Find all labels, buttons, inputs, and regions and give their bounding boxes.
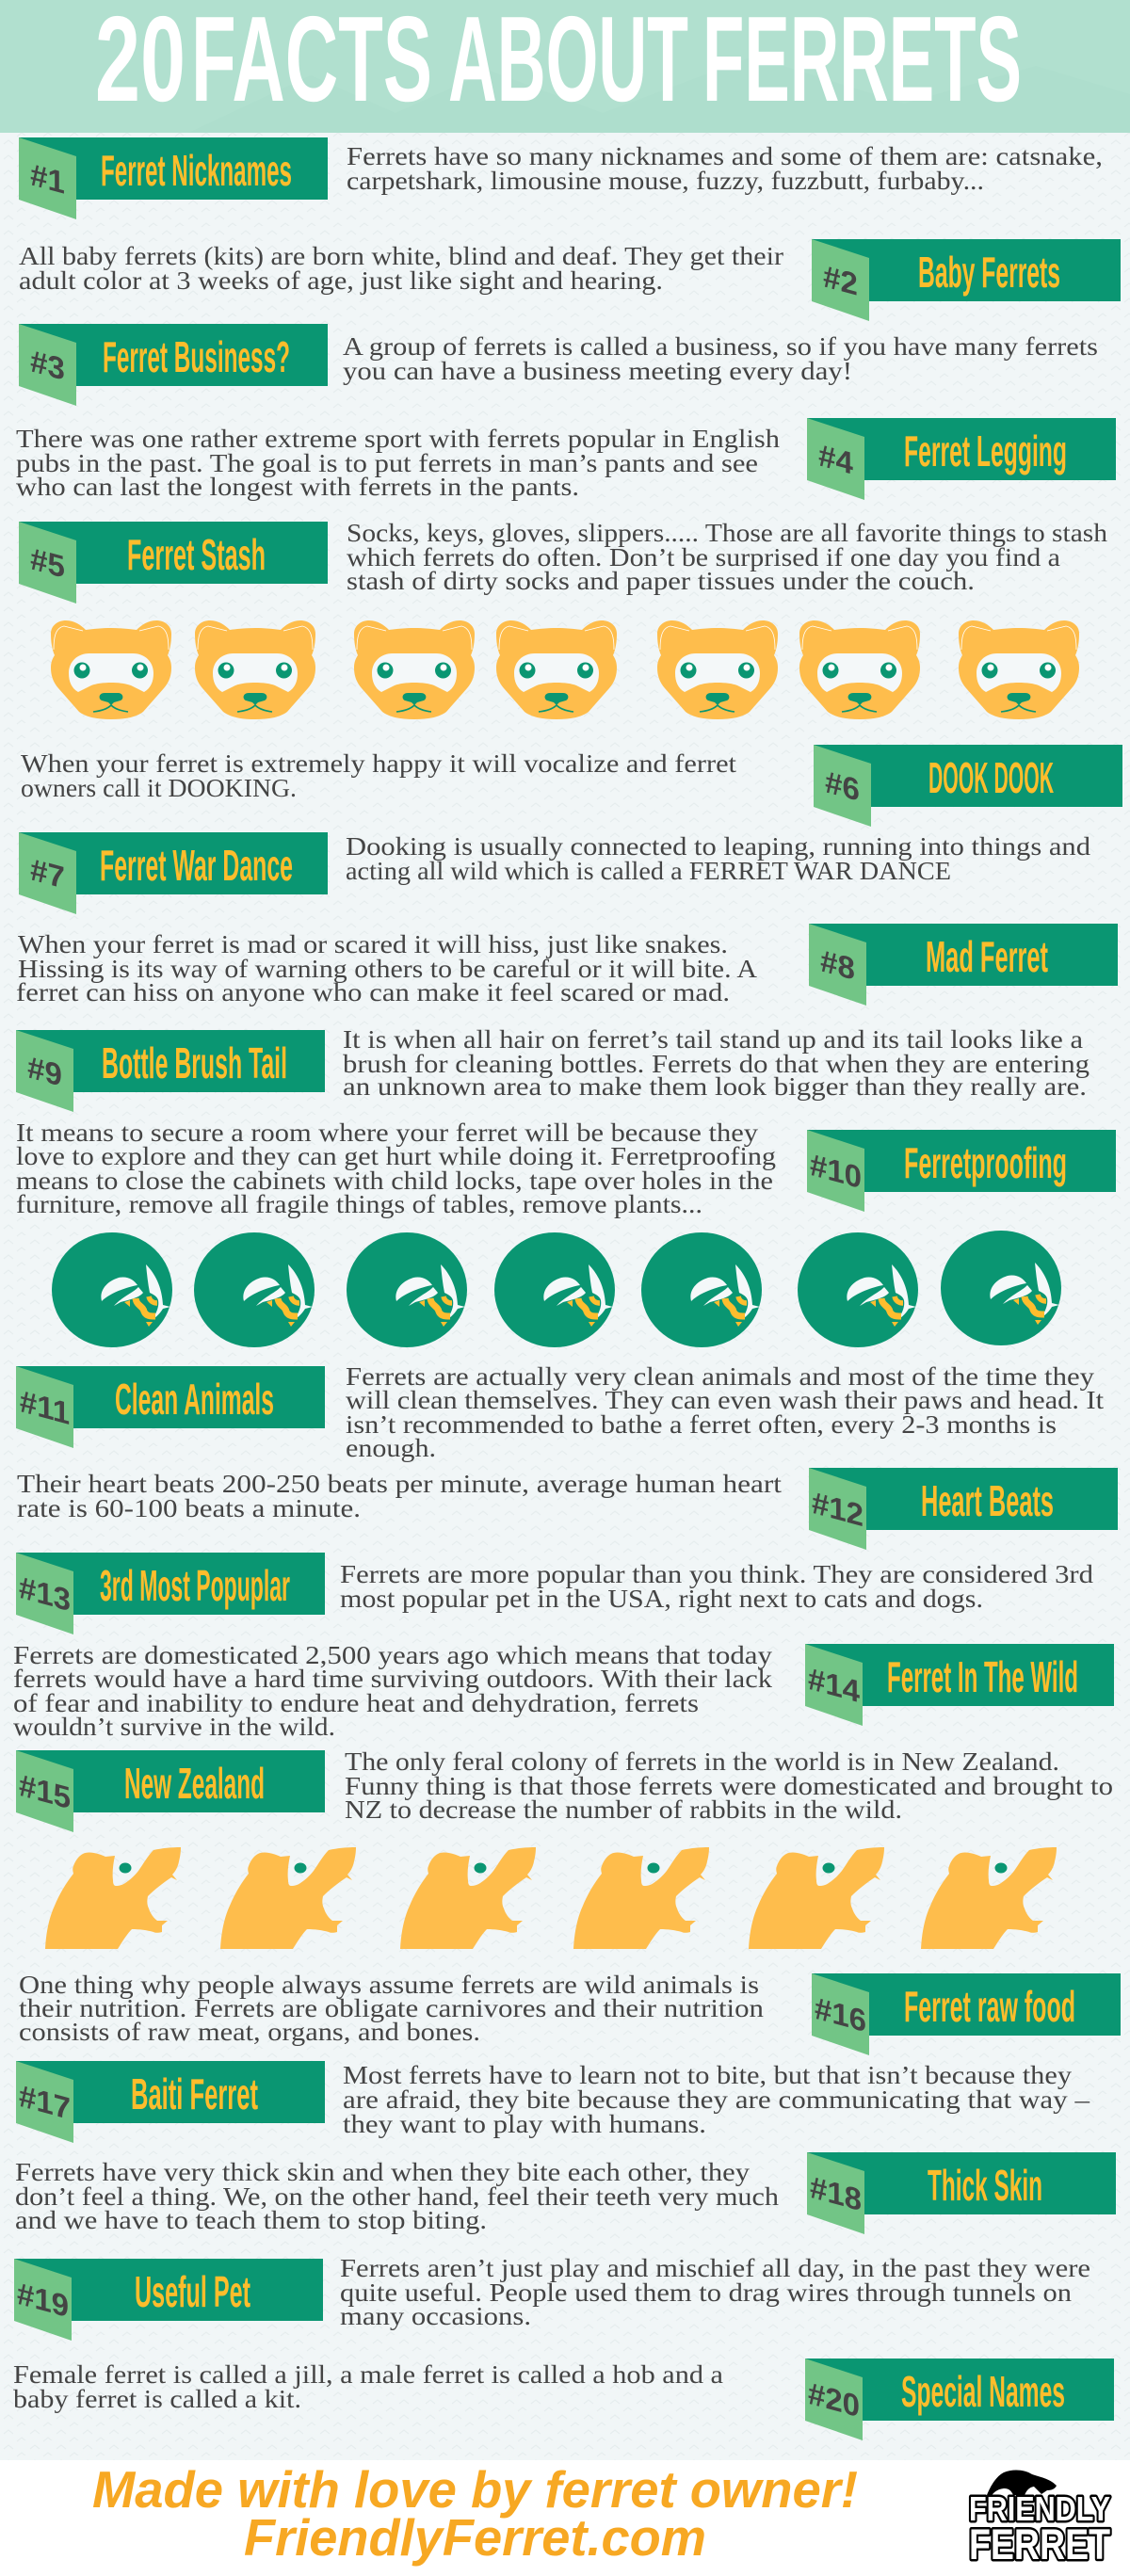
banner: fact 15 bbox=[16, 1750, 325, 1832]
banner: fact 19: Useful Pet bbox=[135, 2267, 250, 2316]
banner: fact 10 bbox=[807, 1130, 1116, 1212]
banner: fact 7: #7 bbox=[30, 853, 65, 896]
banner: fact 20 bbox=[805, 2359, 1114, 2440]
banner: fact 14 bbox=[805, 1644, 1114, 1726]
icon row: ferret profiles bbox=[45, 1847, 1057, 1949]
text: fact 17 bbox=[343, 2060, 1090, 2138]
banner: fact 5 bbox=[19, 522, 328, 604]
text: fact 17: Most ferrets have to learn not to bite, but that isn’t because they bbox=[343, 2060, 1072, 2089]
text: fact 6: owners call it DOOKING. bbox=[21, 773, 297, 802]
banner: fact 9 bbox=[16, 1030, 325, 1112]
panel: fact 8 bbox=[16, 924, 1118, 1006]
panel: fact 11 bbox=[16, 1361, 1104, 1462]
footer text: Made with love by ferret owner! bbox=[92, 2460, 858, 2519]
banner: fact 8: #8 bbox=[820, 944, 855, 988]
text: fact 11: Ferrets are actually very clean animals and most of the time they bbox=[346, 1361, 1094, 1391]
text: fact 16 bbox=[19, 1970, 764, 2046]
header band bbox=[0, 0, 1130, 133]
banner: fact 7: Ferret War Dance bbox=[100, 841, 293, 890]
text: fact 10: means to close the cabinets with child locks, tape over holes in the bbox=[16, 1166, 773, 1195]
text: fact 4: There was one rather extreme sport with ferrets popular in English bbox=[16, 424, 780, 453]
banner: fact 2: #2 bbox=[823, 260, 858, 303]
panel: fact 6 bbox=[21, 745, 1122, 827]
text: fact 15: Funny thing is that those ferrets were domesticated and brought to bbox=[345, 1771, 1113, 1800]
text: fact 20: Female ferret is called a jill, a male ferret is called a hob and a bbox=[13, 2359, 723, 2389]
banner: fact 13 bbox=[16, 1553, 325, 1634]
panel: fact 5 bbox=[19, 518, 1107, 604]
text: fact 19: quite useful. People used them to drag wires through tunnels on bbox=[340, 2278, 1072, 2307]
panel: fact 20 bbox=[13, 2359, 1114, 2440]
title bbox=[95, 0, 1022, 127]
text: fact 5: which ferrets do often. Don’t be surprised if one day you find a bbox=[347, 542, 1060, 572]
banner: fact 16 bbox=[812, 1973, 1121, 2055]
text: fact 6: When your ferret is extremely happy it will vocalize and ferret bbox=[21, 749, 736, 778]
text: fact 16: consists of raw meat, organs, and bones. bbox=[19, 2017, 480, 2046]
banner: fact 1: #1 bbox=[30, 158, 65, 201]
banner: fact 15: New Zealand bbox=[124, 1759, 265, 1808]
text: fact 4 bbox=[16, 424, 780, 501]
panel: fact 4 bbox=[16, 418, 1116, 501]
text: fact 12 bbox=[17, 1469, 782, 1522]
banner: fact 12 bbox=[809, 1468, 1118, 1550]
banner: fact 13: #13 bbox=[19, 1570, 71, 1618]
text: fact 20: baby ferret is called a kit. bbox=[13, 2384, 301, 2413]
panel: fact 2 bbox=[19, 239, 1121, 321]
text: fact 18: don’t feel a thing. We, on the other hand, feel their teeth very much bbox=[15, 2182, 779, 2211]
banner: fact 8 bbox=[809, 924, 1118, 1006]
banner: fact 11: Clean Animals bbox=[115, 1375, 274, 1424]
banner: fact 5: Ferret Stash bbox=[127, 530, 266, 579]
text: fact 1: Ferrets have so many nicknames and some of them are: catsnake, bbox=[347, 141, 1103, 170]
text: fact 11: will clean themselves. They can even wash their paws and head. It bbox=[346, 1385, 1104, 1414]
text: fact 2: All baby ferrets (kits) are born white, blind and deaf. They get their bbox=[19, 241, 783, 270]
text: fact 5: stash of dirty socks and paper tissues under the couch. bbox=[347, 566, 975, 595]
text: fact 10: It means to secure a room where your ferret will be because they bbox=[16, 1118, 758, 1147]
banner: fact 19: #19 bbox=[17, 2277, 69, 2325]
banner: fact 12: #12 bbox=[812, 1486, 864, 1534]
text: fact 11: enough. bbox=[346, 1433, 436, 1462]
text: fact 13: most popular pet in the USA, right next to cats and dogs. bbox=[340, 1584, 983, 1613]
footer band bbox=[0, 2460, 1130, 2576]
text: fact 9: brush for cleaning bottles. Ferrets do that when they are entering bbox=[343, 1049, 1090, 1078]
text: fact 3: A group of ferrets is called a business, so if you have many ferrets bbox=[343, 331, 1098, 361]
text: fact 19 bbox=[340, 2253, 1090, 2330]
text: fact 5 bbox=[347, 518, 1107, 595]
panel: fact 15 bbox=[16, 1747, 1113, 1832]
banner: fact 2 bbox=[812, 239, 1121, 321]
text: fact 3: you can have a business meeting every day! bbox=[343, 356, 852, 385]
text: fact 14 bbox=[13, 1640, 772, 1741]
text: fact 18: and we have to teach them to stop biting. bbox=[15, 2205, 487, 2234]
text: fact 15 bbox=[345, 1747, 1113, 1824]
text: fact 8: ferret can hiss on anyone who can make it feel scared or mad. bbox=[16, 977, 730, 1006]
text: fact 16: their nutrition. Ferrets are obligate carnivores and their nutrition bbox=[19, 1993, 764, 2022]
text: fact 14: ferrets would have a hard time surviving outdoors. With their lack bbox=[13, 1664, 772, 1693]
banner: fact 7 bbox=[19, 832, 328, 914]
banner: fact 19 bbox=[14, 2259, 323, 2341]
text: fact 14: of fear and inability to endure heat and dehydration, ferrets bbox=[13, 1688, 699, 1717]
panel: fact 7 bbox=[19, 831, 1090, 914]
banner: fact 1: Ferret Nicknames bbox=[101, 146, 292, 195]
banner: fact 17: #17 bbox=[19, 2079, 71, 2127]
banner: fact 1 bbox=[19, 137, 328, 219]
text: fact 16: One thing why people always assume ferrets are wild animals is bbox=[19, 1970, 759, 1999]
banner: fact 18: #18 bbox=[810, 2170, 862, 2218]
banner: fact 16: #16 bbox=[815, 1991, 866, 2039]
text: fact 2 bbox=[19, 241, 783, 295]
banner: fact 9: #9 bbox=[27, 1051, 62, 1094]
text: fact 7 bbox=[346, 831, 1090, 885]
text: fact 19: many occasions. bbox=[340, 2301, 531, 2330]
banner: fact 11 bbox=[16, 1366, 325, 1448]
text: fact 9: an unknown area to make them look bigger than they really are. bbox=[343, 1071, 1087, 1101]
panel: fact 13 bbox=[16, 1553, 1093, 1634]
panel: fact 17 bbox=[16, 2060, 1090, 2143]
banner: fact 3: Ferret Business? bbox=[103, 332, 290, 381]
text: fact 17: they want to play with humans. bbox=[343, 2109, 706, 2138]
text: fact 13: Ferrets are more popular than you think. They are considered 3rd bbox=[340, 1559, 1093, 1588]
footer text bbox=[92, 2460, 858, 2567]
text: fact 8 bbox=[16, 929, 757, 1006]
banner: fact 3: #3 bbox=[30, 345, 65, 388]
text: fact 12: Their heart beats 200-250 beats per minute, average human heart bbox=[17, 1469, 782, 1498]
text: fact 9 bbox=[343, 1024, 1090, 1101]
text: fact 4: who can last the longest with ferrets in the pants. bbox=[16, 472, 579, 501]
text: fact 14: Ferrets are domesticated 2,500 years ago which means that today bbox=[13, 1640, 772, 1669]
text: fact 13 bbox=[340, 1559, 1093, 1613]
banner: fact 15: #15 bbox=[19, 1768, 71, 1816]
text: fact 7: Dooking is usually connected to leaping, running into things and bbox=[346, 831, 1090, 861]
icon row: ferret faces bbox=[51, 620, 1079, 719]
banner: fact 3 bbox=[19, 324, 328, 406]
text: fact 17: are afraid, they bite because they are communicating that way – bbox=[343, 2085, 1090, 2114]
icon row: green circle badges bbox=[52, 1231, 1061, 1347]
banner: fact 4: #4 bbox=[818, 439, 853, 482]
text: fact 14: wouldn’t survive in the wild. bbox=[13, 1712, 335, 1741]
text: fact 10 bbox=[16, 1118, 776, 1218]
banner: fact 6: #6 bbox=[825, 765, 860, 809]
text: fact 4: pubs in the past. The goal is to put ferrets in man’s pants and see bbox=[16, 448, 758, 477]
banner: fact 11: #11 bbox=[20, 1384, 70, 1432]
text: fact 1: carpetshark, limousine mouse, fuzzy, fuzzbutt, furbaby... bbox=[347, 166, 984, 195]
text: fact 8: When your ferret is mad or scared it will hiss, just like snakes. bbox=[18, 929, 728, 958]
text: fact 10: love to explore and they can get hurt while doing it. Ferretproofing bbox=[16, 1141, 776, 1170]
text: fact 11: isn’t recommended to bathe a ferret often, every 2-3 months is bbox=[346, 1409, 1057, 1439]
banner: fact 10: #10 bbox=[810, 1148, 862, 1196]
panel: fact 16 bbox=[19, 1970, 1121, 2055]
text: fact 15: NZ to decrease the number of rabbits in the wild. bbox=[345, 1795, 902, 1824]
footer text: FriendlyFerret.com bbox=[244, 2508, 706, 2567]
text: fact 3 bbox=[343, 331, 1098, 385]
banner: fact 5: #5 bbox=[30, 542, 65, 586]
text: fact 1 bbox=[347, 141, 1103, 195]
banner: fact 17: Baiti Ferret bbox=[131, 2069, 258, 2118]
panel: fact 3 bbox=[19, 324, 1098, 406]
text: fact 10: furniture, remove all fragile things of tables, remove plants... bbox=[16, 1189, 702, 1218]
panel: fact 12 bbox=[17, 1468, 1118, 1550]
text: fact 18: Ferrets have very thick skin and when they bite each other, they bbox=[15, 2157, 750, 2186]
text: fact 7: acting all wild which is called a FERRET WAR DANCE bbox=[346, 856, 951, 885]
panel: fact 18 bbox=[15, 2152, 1116, 2234]
banner: fact 20: #20 bbox=[808, 2376, 860, 2424]
text: fact 2: adult color at 3 weeks of age, just like sight and hearing. bbox=[19, 266, 663, 295]
logo: Friendly Ferret bbox=[969, 2471, 1110, 2568]
text: fact 20 bbox=[13, 2359, 723, 2413]
panel: fact 9 bbox=[16, 1024, 1090, 1112]
text: fact 8: Hissing is its way of warning others to be careful or it will bite. A bbox=[18, 954, 757, 983]
panel: fact 19 bbox=[14, 2253, 1090, 2341]
text: fact 5: Socks, keys, gloves, slippers..... Those are all favorite things to stash bbox=[347, 518, 1107, 547]
banner: fact 13: 3rd Most Popuplar bbox=[100, 1561, 290, 1610]
banner: fact 6 bbox=[814, 745, 1122, 827]
text: fact 11 bbox=[346, 1361, 1104, 1462]
panel: fact 14 bbox=[13, 1640, 1114, 1741]
banner: fact 9: Bottle Brush Tail bbox=[102, 1038, 287, 1087]
panel: fact 10 bbox=[16, 1118, 1116, 1218]
banner: fact 14: #14 bbox=[808, 1662, 860, 1710]
text: fact 19: Ferrets aren’t just play and mischief all day, in the past they were bbox=[340, 2253, 1090, 2282]
panel: fact 1 bbox=[19, 137, 1103, 219]
text: fact 6 bbox=[21, 749, 736, 802]
text: fact 12: rate is 60-100 beats a minute. bbox=[17, 1493, 361, 1522]
banner: fact 4 bbox=[807, 418, 1116, 500]
text: fact 18 bbox=[15, 2157, 779, 2234]
banner: fact 18 bbox=[807, 2152, 1116, 2234]
text: fact 15: The only feral colony of ferrets in the world is in New Zealand. bbox=[345, 1747, 1059, 1776]
text: fact 9: It is when all hair on ferret’s tail stand up and its tail looks like a bbox=[343, 1024, 1083, 1054]
banner: fact 17 bbox=[16, 2061, 325, 2143]
